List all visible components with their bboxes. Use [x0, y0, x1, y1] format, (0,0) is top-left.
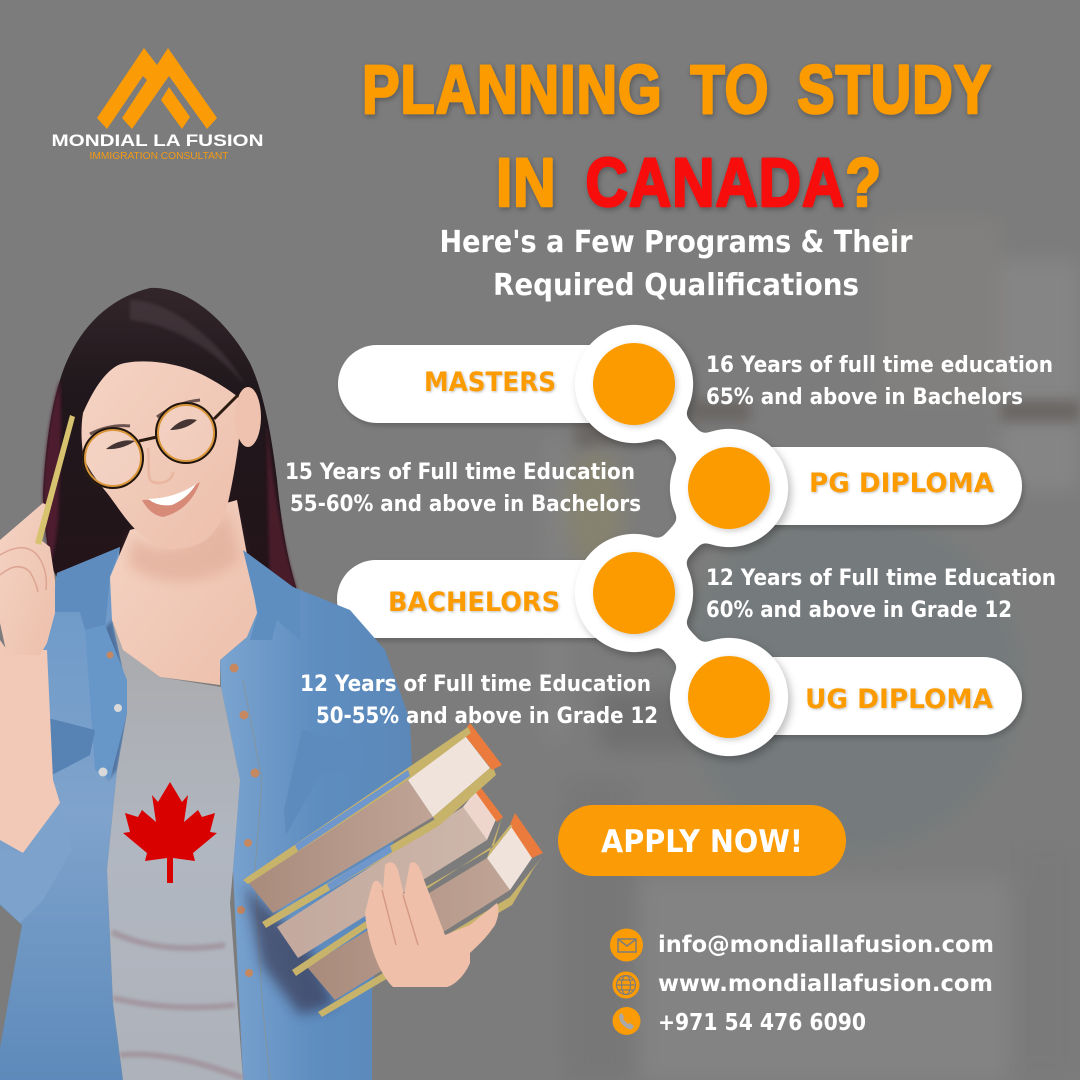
logo: Mondial La Fusion: [52, 48, 264, 162]
finger creases: [0, 548, 46, 592]
contact text: www.mondiallafusion.com: [658, 969, 993, 997]
logo mark: [97, 48, 217, 129]
contact details: [610, 928, 994, 1036]
left placket: [85, 625, 127, 780]
program labels: PG DIPLOMA: [809, 468, 994, 499]
title line 2: IN CANADA?: [496, 144, 882, 221]
grey background gap under cuff: [0, 905, 22, 1048]
white connected node chain: [576, 326, 787, 755]
jacket seam: [243, 680, 270, 1080]
left inner dark shade: [95, 620, 127, 780]
apply now button: APPLY NOW!: [601, 824, 803, 860]
jacket left panel: [0, 547, 127, 1080]
nose shading: [148, 448, 173, 483]
icon: phone: [612, 1007, 640, 1035]
hair top sheen: [130, 300, 245, 385]
collar left: [52, 547, 120, 630]
face: [82, 361, 239, 549]
grey t-shirt: [107, 620, 243, 1080]
pg diploma requirements: [285, 459, 641, 517]
shadow under books: [245, 885, 335, 1015]
program labels: [388, 367, 994, 715]
ug diploma requirements: 12 Years of Full time Education: [300, 671, 651, 697]
hair red tint strand: [43, 380, 61, 563]
contact text: info@mondiallafusion.com: [658, 930, 994, 958]
bachelors requirements: 60% and above in Grade 12: [706, 597, 1012, 623]
pg diploma requirements: 15 Years of Full time Education: [285, 459, 635, 485]
eyes: [106, 419, 197, 449]
orange node circles: [593, 343, 770, 738]
programs flow: [337, 326, 1022, 755]
apply now button: [558, 805, 846, 876]
collar right: [243, 550, 300, 640]
subtitle: Required Qualifications: [493, 268, 859, 303]
woman photo illustration: [0, 288, 543, 1080]
contact text: +971 54 476 6090: [658, 1008, 866, 1036]
book 1: [243, 723, 502, 913]
pencil: [35, 415, 75, 545]
pg diploma requirements: 55-60% and above in Bachelors: [290, 491, 641, 517]
ug diploma requirements: [300, 671, 658, 729]
tagline: IMMIGRATION CONSULTANT: [90, 151, 228, 162]
maple leaf: [123, 782, 217, 883]
masters requirements: 65% and above in Bachelors: [706, 384, 1023, 410]
hair back: [43, 288, 297, 590]
subtitle: Here's a Few Programs & Their: [440, 225, 913, 260]
chin shadow on neck: [128, 510, 240, 581]
masters requirements: [706, 352, 1053, 410]
hair right tint strand: [266, 420, 297, 590]
t-shirt fold shadows: [112, 932, 243, 1078]
program labels: MASTERS: [424, 367, 556, 398]
program labels: UG DIPLOMA: [805, 684, 993, 715]
rolled cuff: [0, 803, 72, 923]
right pocket: [284, 730, 365, 835]
program labels: BACHELORS: [388, 587, 560, 618]
bachelors requirements: [706, 565, 1056, 623]
ear: [235, 387, 261, 447]
qualification texts: [285, 352, 1056, 729]
raised arm: [0, 640, 60, 853]
icon: globe: [612, 972, 640, 998]
book 3: [307, 813, 543, 1017]
hand on books: [365, 862, 498, 987]
jacket buttons: [106, 652, 260, 977]
eyebrows: [90, 400, 200, 434]
ug diploma requirements: 50-55% and above in Grade 12: [316, 703, 658, 729]
title: [362, 51, 992, 221]
jacket right panel: [220, 550, 412, 1080]
contact text: [658, 930, 994, 1036]
hand finger lines: [382, 890, 418, 945]
book 2: [262, 767, 503, 976]
chest pocket left: [48, 718, 95, 775]
neck and chest: [110, 500, 257, 685]
hand: [0, 503, 55, 655]
wordmark: MONDIAL LA FUSION: [52, 131, 264, 150]
white buttons left: [98, 704, 122, 776]
icon: email: [610, 928, 643, 962]
glasses: [83, 395, 238, 488]
smile: [142, 482, 200, 517]
subtitle: [440, 225, 913, 303]
stack of books: [243, 723, 543, 1017]
white pills: [337, 345, 1022, 735]
